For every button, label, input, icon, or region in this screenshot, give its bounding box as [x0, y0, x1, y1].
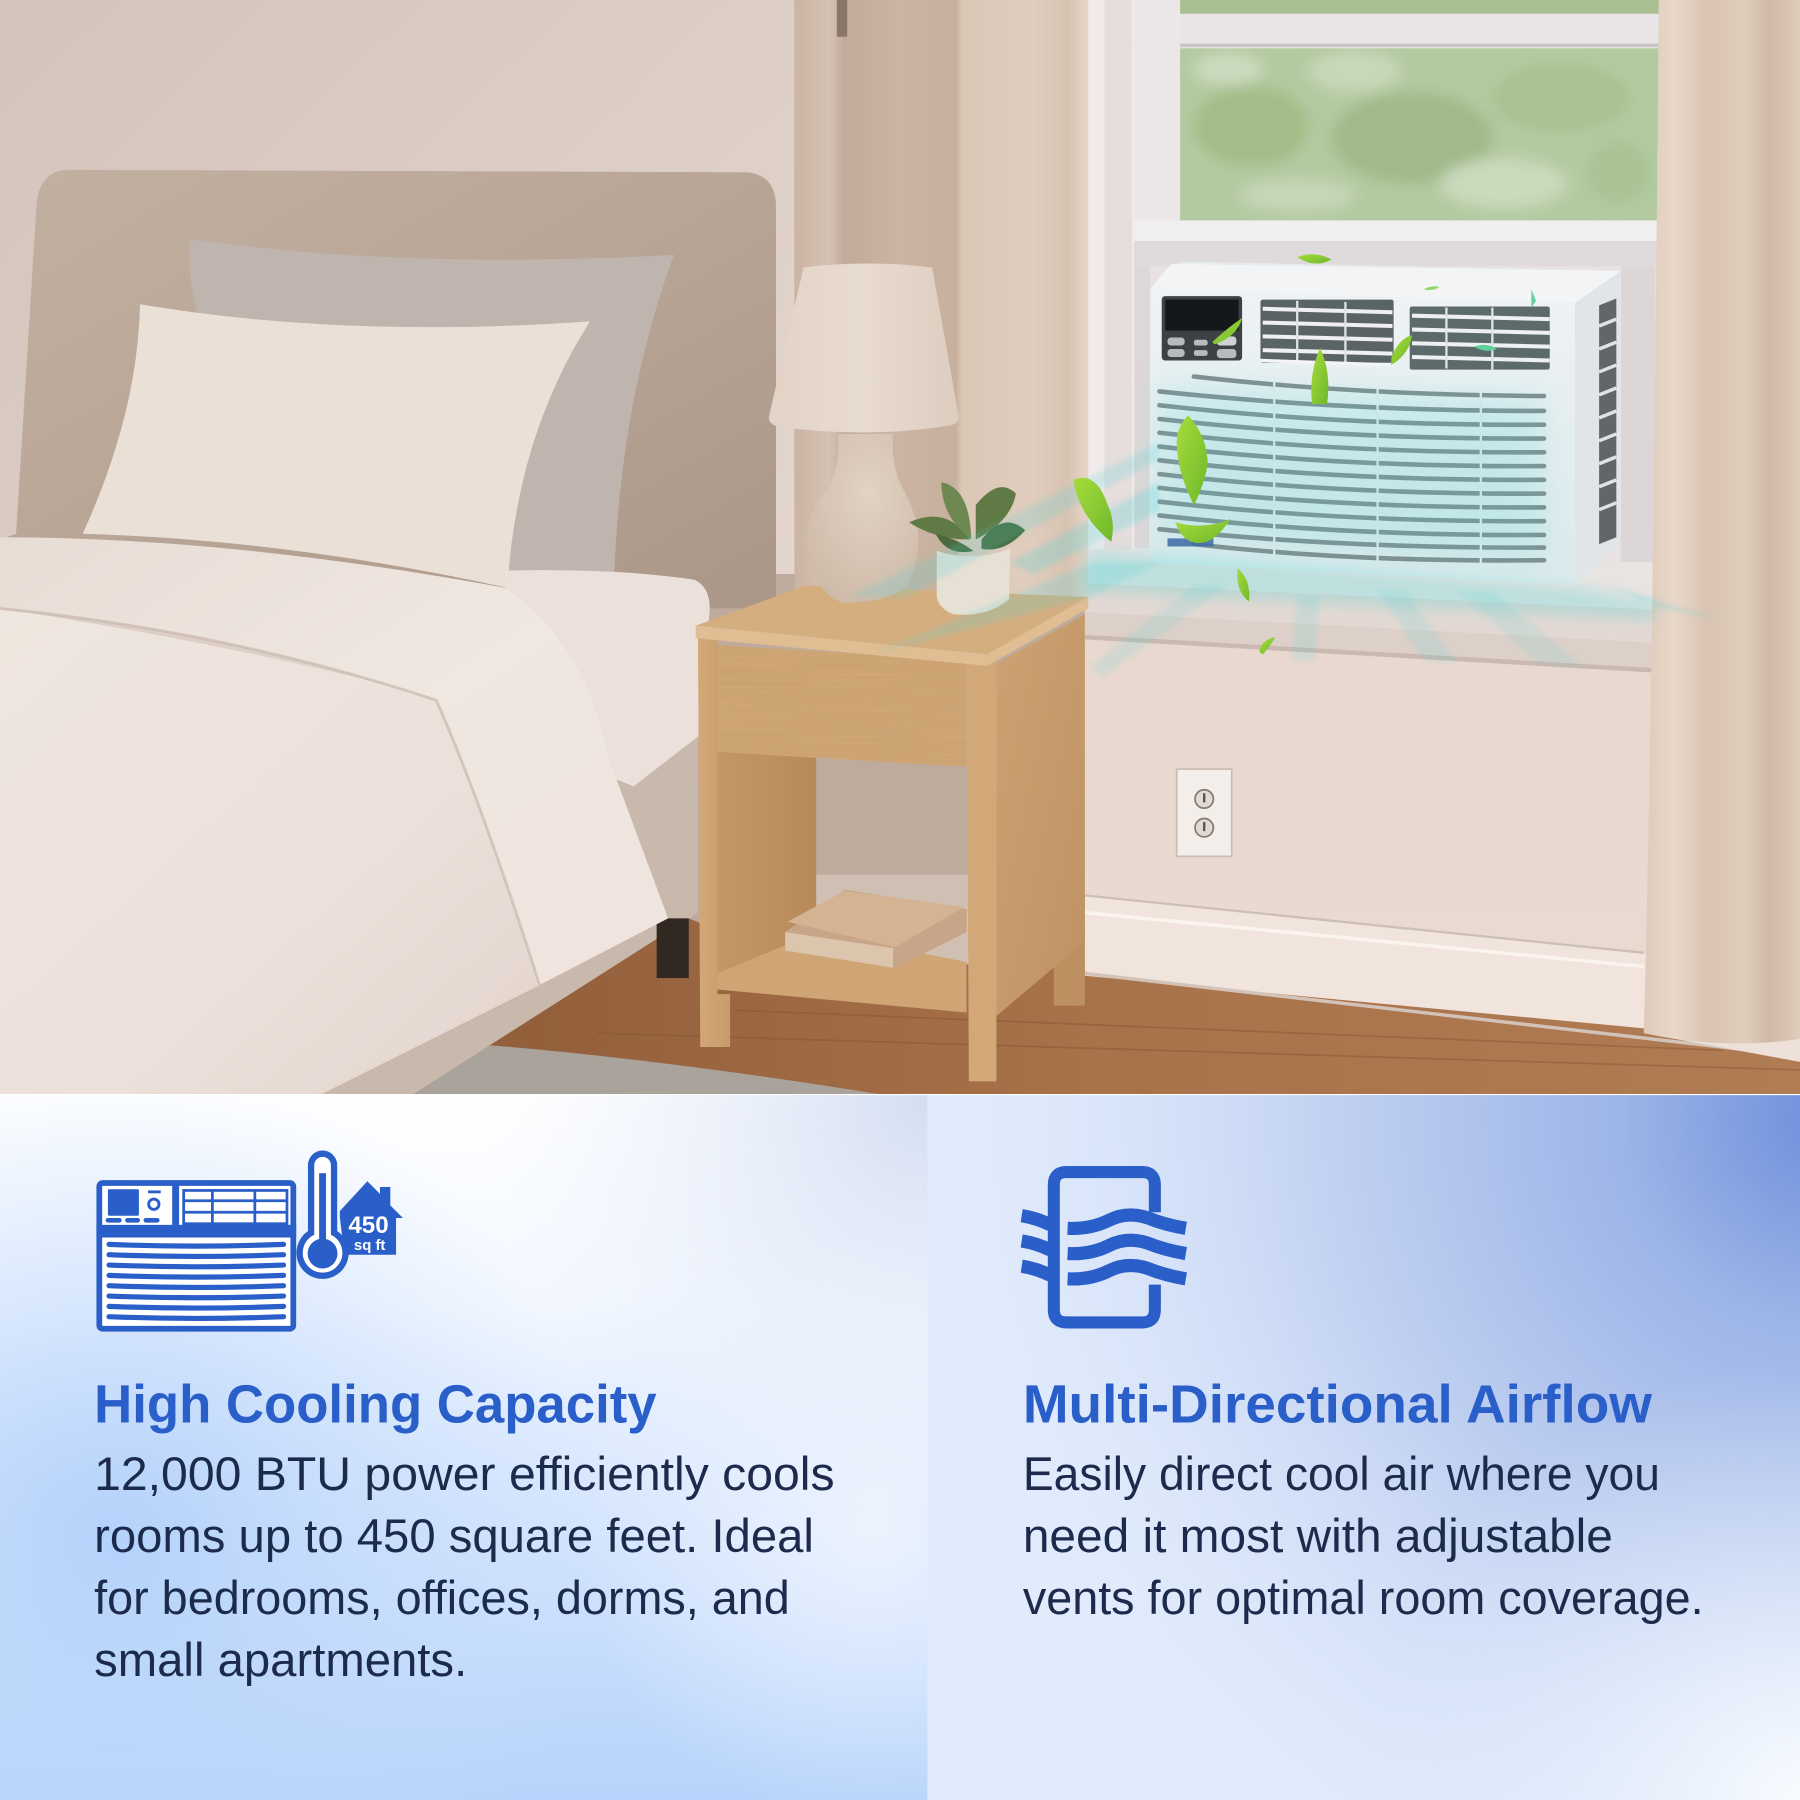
body text: airflow: need it most with adjustable — [1023, 1509, 1613, 1562]
books — [785, 890, 967, 968]
heading: multi-directional airflow: Multi-Directional Airflow — [1023, 1374, 1653, 1434]
cream front pillow — [83, 304, 590, 588]
brand label — [1167, 538, 1213, 546]
potted plant — [909, 482, 1025, 615]
window sill — [1085, 549, 1655, 673]
panel: high cooling capacity — [0, 1095, 928, 1800]
wood floor — [402, 918, 1800, 1094]
panel background left — [0, 1095, 928, 1800]
table lamp — [769, 263, 959, 603]
alcove wall behind nightstand — [689, 574, 1102, 990]
duvet — [0, 537, 668, 1094]
icon: house with 450 sq ft — [340, 1181, 403, 1255]
icon: house with 450 sq ft: sq ft — [354, 1237, 385, 1254]
body text: cooling capacity: for bedrooms, offices, dorms, and — [94, 1571, 790, 1624]
headboard — [0, 170, 776, 620]
upper vent left — [1260, 300, 1394, 365]
photo: bedroom scene with window air conditioner — [0, 0, 1800, 1094]
cabinet interior — [717, 752, 816, 982]
drawer — [717, 645, 967, 767]
control panel — [1162, 296, 1242, 360]
wall outlet — [1177, 769, 1232, 856]
nightstand — [696, 585, 1088, 1081]
mattress sheet — [505, 570, 710, 786]
side vent — [1599, 298, 1616, 544]
wall — [0, 0, 827, 804]
cool airflow streams — [849, 385, 1722, 677]
icon: airflow through vent — [1022, 1172, 1186, 1322]
body text: cooling capacity: small apartments. — [94, 1633, 467, 1686]
body text: airflow: vents for optimal room coverage. — [1023, 1571, 1704, 1624]
icon: air conditioner, thermometer and house — [96, 1154, 403, 1329]
right curtain — [1644, 0, 1800, 1043]
rug — [402, 1042, 878, 1094]
lamp base — [807, 434, 918, 603]
table top — [696, 585, 1088, 654]
flying leaves — [1073, 254, 1536, 654]
icon: house with 450 sq ft: 450 — [348, 1212, 389, 1239]
lamp shade — [769, 263, 959, 433]
air conditioner unit — [1149, 262, 1621, 585]
body text: cooling capacity: 12,000 BTU power efficiently cools — [94, 1447, 835, 1500]
body text: airflow — [1023, 1447, 1704, 1624]
baseboard — [1085, 895, 1800, 1062]
window wall — [1085, 0, 1659, 1004]
back right leg — [1054, 895, 1085, 1006]
front left leg — [698, 637, 730, 1047]
icon: thermometer — [300, 1154, 346, 1276]
panel: multi-directional airflow — [928, 1095, 1800, 1800]
shelf — [717, 932, 967, 1012]
body text: airflow: Easily direct cool air where you — [1023, 1447, 1660, 1500]
left curtain — [794, 0, 1088, 608]
panel background right — [928, 1095, 1800, 1800]
main grille louvres — [1159, 377, 1544, 562]
bed base — [321, 735, 698, 1094]
icon: air conditioner — [96, 1182, 296, 1329]
body text: cooling capacity — [94, 1447, 835, 1686]
window glass with trees — [1171, 0, 1659, 220]
cabinet side — [996, 614, 1085, 1016]
upper vent right — [1410, 307, 1550, 370]
body text: cooling capacity: rooms up to 450 square feet. Ideal — [94, 1509, 814, 1562]
heading: high cooling capacity: High Cooling Capacity — [94, 1374, 657, 1434]
window sash rails — [1134, 0, 1659, 565]
unit body — [1149, 262, 1621, 585]
grey back pillow — [189, 239, 674, 580]
front right leg — [967, 654, 996, 1081]
